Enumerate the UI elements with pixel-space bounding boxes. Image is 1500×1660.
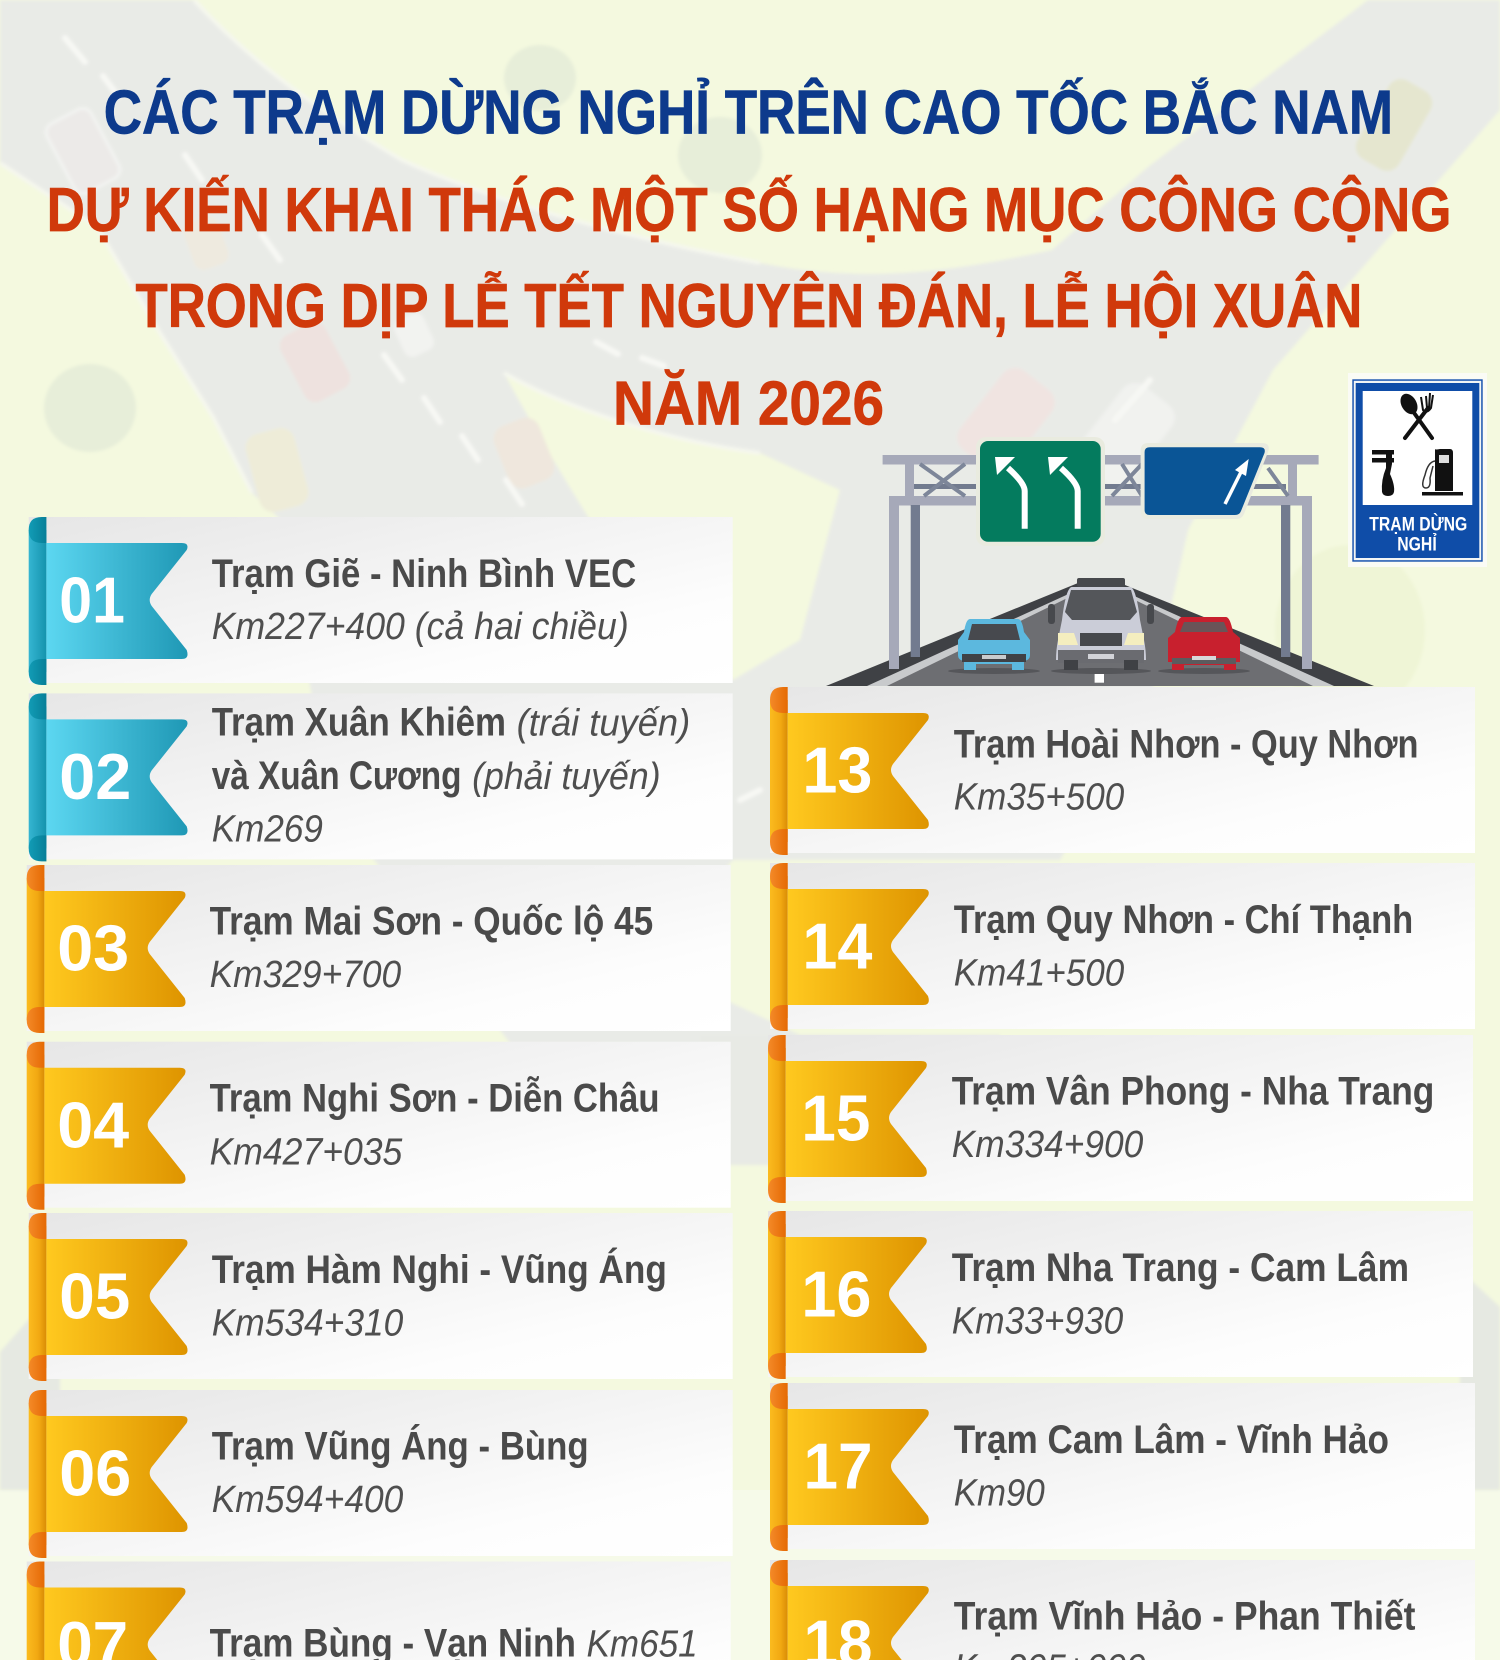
km 16: Km33+930 <box>952 1300 1123 1342</box>
name 04: Trạm Nghi Sơn - Diễn Châu <box>210 1075 660 1121</box>
car: blue <box>948 619 1040 674</box>
name 05: Trạm Hàm Nghi - Vũng Áng <box>212 1247 667 1292</box>
number 02: 02 <box>59 740 131 813</box>
name 18: Trạm Vĩnh Hảo - Phan Thiết <box>954 1594 1415 1638</box>
ribbon 03 <box>27 865 186 1033</box>
gantry frame <box>883 455 1319 669</box>
car: red <box>1158 617 1250 674</box>
icon: fuel pump <box>1422 449 1463 496</box>
km 01: Km227+400 (cả hai chiều) <box>212 606 629 648</box>
number 14: 14 <box>802 910 872 983</box>
number 16: 16 <box>801 1258 871 1331</box>
name 06: Trạm Vũng Áng - Bùng <box>212 1424 589 1468</box>
ribbon 01 <box>29 517 188 685</box>
sign label: NGHỈ <box>1397 533 1437 556</box>
ribbon 16 <box>768 1211 927 1379</box>
sign: blue exit arrow <box>1141 443 1269 519</box>
name 17: Trạm Cam Lâm - Vĩnh Hảo <box>954 1418 1389 1462</box>
number 03: 03 <box>57 912 129 985</box>
ribbon 18 <box>770 1560 929 1660</box>
panel: station 06 <box>29 1390 733 1558</box>
sign label <box>1369 512 1467 556</box>
icon: spoon and fork <box>1397 391 1433 438</box>
ribbon 05 <box>29 1213 188 1381</box>
name 14: Trạm Quy Nhơn - Chí Thạnh <box>954 898 1413 942</box>
name 02: (phải tuyến) <box>472 756 661 798</box>
sign label: TRẠM DỪNG <box>1369 512 1467 536</box>
panel: station 03 <box>27 865 731 1033</box>
name 01: Trạm Giẽ - Ninh Bình VEC <box>212 552 636 596</box>
panel: station 14 <box>770 863 1475 1031</box>
panel: station 17 <box>770 1383 1475 1551</box>
panel: station 05 <box>29 1213 733 1381</box>
name 02: (trái tuyến) <box>517 702 690 744</box>
number 06: 06 <box>59 1437 131 1510</box>
name 02: Trạm Xuân Khiêm <box>212 700 506 744</box>
ribbon 13 <box>770 687 929 855</box>
title line 4: NĂM 2026 <box>613 370 884 439</box>
name 16: Trạm Nha Trang - Cam Lâm <box>952 1246 1409 1290</box>
km 13: Km35+500 <box>954 776 1124 818</box>
km 02: Km269 <box>212 809 323 851</box>
ribbon 15 <box>768 1035 927 1203</box>
panel: station 18 <box>770 1560 1475 1660</box>
icon: wrench <box>1372 450 1394 496</box>
ribbon 02 <box>29 693 188 861</box>
number 13: 13 <box>802 734 872 807</box>
km 15: Km334+900 <box>952 1124 1143 1166</box>
title <box>47 78 1451 439</box>
ribbon 07 <box>27 1562 186 1660</box>
ribbon 06 <box>29 1390 188 1558</box>
panel: station 13 <box>770 687 1475 855</box>
km 04: Km427+035 <box>210 1132 403 1174</box>
km 06: Km594+400 <box>212 1479 403 1521</box>
name 02 <box>212 700 690 798</box>
km 03: Km329+700 <box>210 954 401 996</box>
sign: green lane arrows <box>976 437 1105 546</box>
name 13: Trạm Hoài Nhơn - Quy Nhơn <box>954 722 1418 766</box>
km 14: Km41+500 <box>954 952 1124 994</box>
road sign: rest stop <box>1348 373 1487 567</box>
name 15: Trạm Vân Phong - Nha Trang <box>952 1070 1434 1114</box>
road <box>826 583 1374 686</box>
number 01: 01 <box>59 564 125 637</box>
name 02: và Xuân Cương <box>212 754 462 798</box>
panel: station 01 <box>29 517 733 685</box>
ribbon 04 <box>27 1042 186 1210</box>
number 17: 17 <box>804 1430 872 1503</box>
name 03: Trạm Mai Sơn - Quốc lộ 45 <box>210 900 653 944</box>
number 05: 05 <box>59 1260 130 1333</box>
km 05: Km534+310 <box>212 1302 403 1344</box>
number 15: 15 <box>801 1082 870 1155</box>
ribbon 17 <box>770 1383 929 1551</box>
number 04: 04 <box>57 1088 129 1161</box>
panel: station 16 <box>768 1211 1473 1379</box>
panel: station 07 <box>27 1562 731 1660</box>
panel: station 15 <box>768 1035 1473 1203</box>
illustration: highway gantry with cars <box>826 437 1374 686</box>
panel: station 04 <box>27 1042 731 1210</box>
km 17: Km90 <box>954 1472 1045 1514</box>
panel: station 02 <box>29 693 733 861</box>
ribbon 14 <box>770 863 929 1031</box>
van: white <box>1048 578 1154 674</box>
